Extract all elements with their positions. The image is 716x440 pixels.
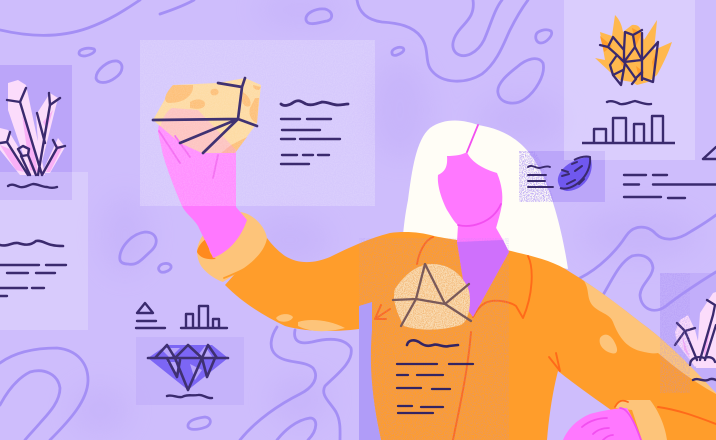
- panel: top-right card: [564, 0, 695, 160]
- rock on chest: [394, 264, 470, 330]
- icon: dark seed: [558, 157, 592, 191]
- rock crack lines: [393, 264, 471, 326]
- small bar chart: [181, 306, 227, 328]
- lower-right crystals: [675, 292, 716, 380]
- hand: [158, 108, 247, 258]
- caption squiggle: [607, 101, 651, 104]
- panel: lower-left card text: [0, 241, 66, 296]
- face: [438, 125, 502, 232]
- cuff: [615, 400, 667, 440]
- icon: orange crystals top right: [582, 15, 675, 143]
- card: lower-right crystal background: [660, 273, 716, 393]
- orange shards: [595, 15, 672, 85]
- sleeve cuff: [197, 212, 267, 282]
- crystal outlines: [600, 30, 658, 85]
- card: lower left text background: [0, 172, 88, 330]
- main card grain: [140, 40, 375, 206]
- caption squiggle: [693, 379, 716, 380]
- crystal outlines: [675, 300, 716, 365]
- panel: diamond card: [136, 337, 244, 405]
- woman: torso and arms: [225, 225, 716, 440]
- crystal caption squiggle: [8, 184, 57, 188]
- crystal shards: [0, 80, 65, 175]
- crystal outlines: [0, 88, 65, 175]
- main card text lines: [281, 101, 348, 164]
- cuff lower band: [224, 263, 253, 278]
- lower-right card grain: [660, 273, 690, 393]
- finger lines: [582, 408, 641, 440]
- raised hand holding rock: [153, 78, 267, 282]
- diamond fill: [148, 345, 228, 390]
- icon: pink crystals left: [0, 80, 65, 188]
- cuff line: [615, 401, 628, 407]
- card text lines: [528, 166, 553, 187]
- small leaf card contents: [528, 157, 592, 191]
- neck through card: [457, 240, 509, 317]
- hand: [563, 408, 642, 440]
- diamond outline: [148, 345, 228, 390]
- card: small leaf background: [519, 151, 605, 202]
- lower hand and cuff: [563, 400, 667, 440]
- card left strip over background: [359, 302, 381, 440]
- crystal shard shadows: [0, 110, 62, 172]
- rock spots: [165, 85, 261, 153]
- right text block with triangle icon: [624, 147, 716, 198]
- rock crack lines: [153, 78, 257, 153]
- small card grain over hair: [519, 151, 554, 202]
- panel: main card: [140, 40, 375, 206]
- card grain over background and shirt: [359, 238, 509, 440]
- bar chart: [582, 116, 675, 143]
- finger lines: [159, 131, 218, 178]
- rock: [153, 78, 261, 153]
- hair: [403, 120, 568, 269]
- hair parting line: [467, 125, 478, 152]
- fingers seen through rock: [160, 108, 236, 153]
- shoulder highlight: [584, 281, 716, 394]
- neck: [457, 225, 509, 317]
- card text lines: [397, 340, 473, 413]
- cuff inner shadow: [197, 235, 216, 259]
- darker orange facets: [600, 28, 656, 82]
- card: left crystal background: [0, 65, 72, 200]
- pink crystal shards: [675, 292, 716, 368]
- caption squiggle: [167, 395, 212, 398]
- shirt collar lines: [375, 237, 716, 440]
- panel: chest card: [359, 238, 509, 440]
- icons: triangle legend and bar chart: [136, 303, 227, 328]
- arm highlight dots: [276, 314, 617, 354]
- crystal shadows: [682, 320, 712, 358]
- torso and sleeves: [225, 232, 716, 440]
- chin line: [458, 204, 501, 226]
